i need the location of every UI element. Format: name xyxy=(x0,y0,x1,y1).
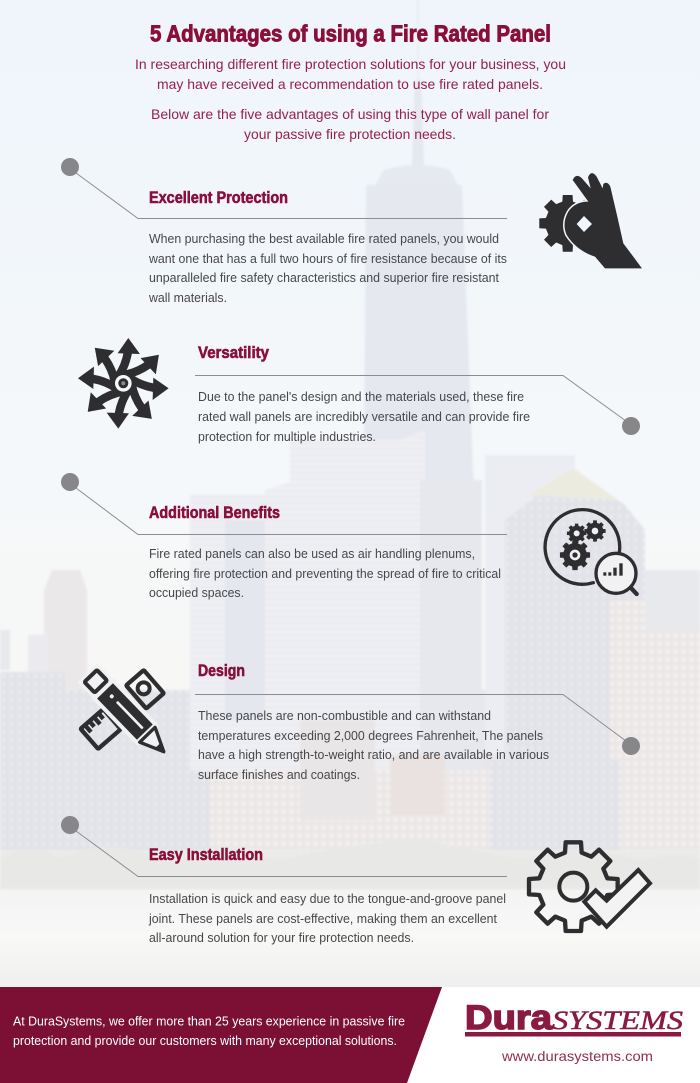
body text: want one that has a full two hours of fire resistance because of its xyxy=(148,251,507,266)
footer xyxy=(0,987,700,1083)
intro text: your passive fire protection needs. xyxy=(244,126,456,142)
intro text: may have received a recommendation to use fire rated panels. xyxy=(157,76,543,92)
white logo area xyxy=(0,987,700,1083)
logo: SYSTEMS xyxy=(552,1006,683,1035)
title: 5 Advantages of using a Fire Rated Panel xyxy=(150,20,551,46)
body text: protection for multiple industries. xyxy=(198,429,376,444)
website: www.durasystems.com xyxy=(501,1048,653,1064)
logo xyxy=(465,999,683,1037)
body text: occupied spaces. xyxy=(149,585,244,600)
connector dot and line xyxy=(61,816,507,876)
logo: Dura xyxy=(465,999,553,1037)
heading: Additional Benefits xyxy=(149,503,280,522)
heading: Design xyxy=(198,661,245,680)
body text: rated wall panels are incredibly versatile and can provide fire xyxy=(198,409,530,424)
body text xyxy=(198,389,530,444)
body text xyxy=(148,231,507,305)
body text: joint. These panels are cost-effective, making them an excellent xyxy=(148,911,497,926)
body text: Fire rated panels can also be used as air handling plenums, xyxy=(149,546,475,561)
body text: These panels are non-combustible and can withstand xyxy=(198,708,491,723)
icon: hand ok with gear xyxy=(539,173,642,268)
connector dot and line xyxy=(61,473,507,534)
heading: Versatility xyxy=(198,343,269,362)
body text: offering fire protection and preventing the spread of fire to critical xyxy=(149,566,501,581)
body text: unparalleled fire safety characteristics and superior fire resistant xyxy=(149,270,499,285)
panel: excellent protection xyxy=(61,158,642,305)
connector line and dot xyxy=(195,376,640,435)
body text: wall materials. xyxy=(148,290,227,305)
body text xyxy=(148,891,506,945)
icon: gear with check mark xyxy=(529,842,650,931)
footer text xyxy=(13,1014,405,1048)
body text: When purchasing the best available fire rated panels, you would xyxy=(149,231,499,246)
footer banner xyxy=(0,987,442,1083)
connector line and dot xyxy=(195,694,640,755)
body text: temperatures exceeding 2,000 degrees Fahrenheit, The panels xyxy=(198,728,543,743)
icon: pencil and ruler xyxy=(80,665,174,762)
panel: additional benefits xyxy=(61,473,637,600)
icon: gears and magnifier xyxy=(545,510,637,594)
panel: design xyxy=(80,661,640,782)
heading: Easy Installation xyxy=(149,845,263,864)
body text xyxy=(149,546,501,600)
body text: all-around solution for your fire protection needs. xyxy=(149,930,414,945)
panel: versatility xyxy=(78,338,640,444)
connector dot and line xyxy=(61,158,507,218)
body text: Due to the panel's design and the materials used, these fire xyxy=(198,389,524,404)
intro text: Below are the five advantages of using this type of wall panel for xyxy=(151,106,549,122)
body text: Installation is quick and easy due to the tongue-and-groove panel xyxy=(149,891,506,906)
body text: surface finishes and coatings. xyxy=(198,767,360,782)
footer text: At DuraSystems, we offer more than 25 years experience in passive fire xyxy=(13,1014,405,1028)
footer text: protection and provide our customers with many exceptional solutions. xyxy=(13,1033,397,1048)
intro text xyxy=(135,56,566,142)
body text: have a high strength-to-weight ratio, and are available in various xyxy=(198,747,549,762)
heading: Excellent Protection xyxy=(149,188,288,207)
intro text: In researching different fire protection solutions for your business, you xyxy=(135,56,566,72)
icon: radial arrows xyxy=(78,338,169,429)
panel: easy installation xyxy=(61,816,650,945)
body text xyxy=(198,708,549,782)
